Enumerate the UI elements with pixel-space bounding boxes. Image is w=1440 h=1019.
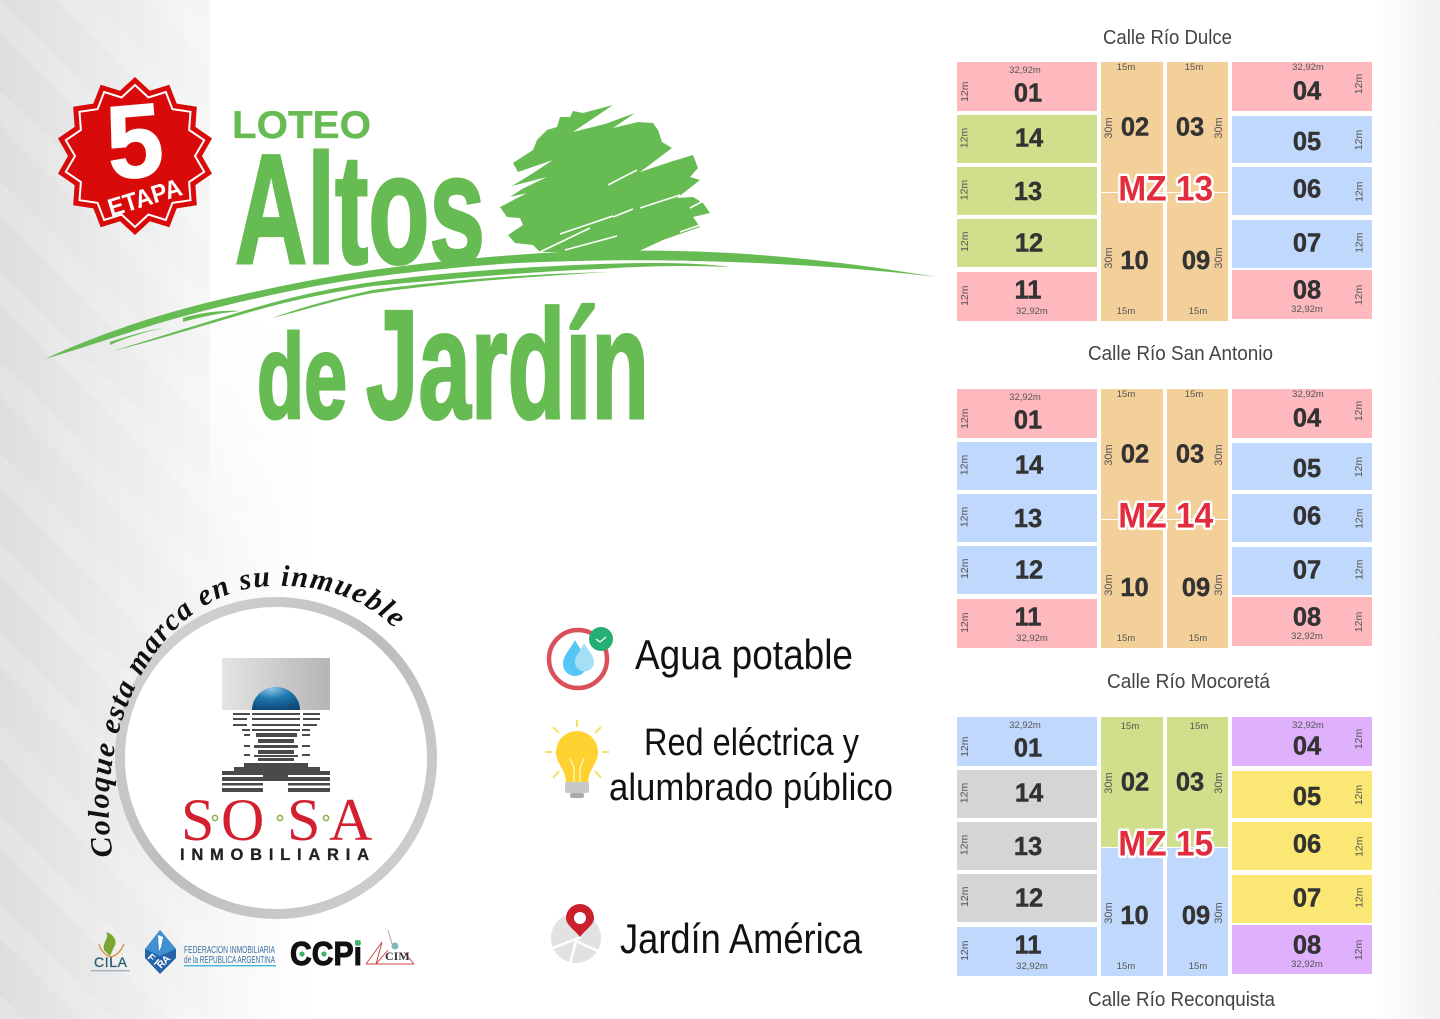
panel: manzana 15: 04: [1293, 732, 1322, 760]
panel: manzana 14: 13: [1014, 505, 1042, 533]
panel: manzana 15: 15m: [1189, 961, 1207, 972]
icon: map pin: [551, 904, 601, 964]
logo words: de Jardín: Jardín: [366, 278, 649, 451]
panel: manzana 13: 12m: [958, 180, 970, 200]
logo building mark: [222, 658, 330, 792]
panel: manzana 13: 13: [1014, 178, 1042, 206]
logo: Federación Inmobiliaria: [184, 945, 276, 966]
service: red eléctrica: [545, 720, 893, 809]
panel: manzana 13: 32,92m: [1292, 62, 1324, 73]
panel: manzana 13: 07: [1293, 230, 1321, 258]
logo: CIM: [366, 930, 414, 964]
text: red eléctrica: alumbrado público: [609, 767, 893, 809]
panel: manzana 14: 30m: [1213, 574, 1225, 596]
street label: Calle Río San Antonio: Calle Río San Antonio: [1088, 343, 1273, 365]
panel: manzana 13: 12m: [1353, 74, 1365, 94]
panel: manzana 14: 12m: [1353, 401, 1365, 421]
street label: Calle Río Reconquista: Calle Río Reconquista: [1088, 989, 1276, 1011]
panel: manzana 15: 12m: [1353, 785, 1365, 805]
icon: light bulb: [545, 720, 609, 798]
logo: CIM: CIM: [385, 949, 410, 963]
panel: manzana 14: 12m: [1353, 559, 1365, 580]
logo swoosh: [45, 251, 937, 359]
panel: manzana 15: 15m: [1121, 721, 1139, 732]
panel: manzana 14: 32,92m: [1016, 633, 1048, 644]
panel: manzana 13: 12: [1015, 230, 1043, 258]
panel: manzana 14: [957, 389, 1372, 648]
panel: manzana 15: 12m: [959, 736, 971, 757]
panel: manzana 15: 03: [1176, 769, 1204, 797]
panel: manzana 14: 10: [1120, 574, 1149, 602]
panel: manzana 14: 05: [1293, 455, 1321, 483]
text: agua potable: Agua potable: [635, 631, 853, 678]
panel: manzana 13: 03: [1176, 114, 1204, 142]
panel: manzana 14: 01: [1014, 407, 1042, 435]
panel: manzana 13: 05: [1293, 128, 1321, 156]
panel: manzana 15: 13: [1014, 833, 1042, 861]
panel: manzana 15: 32,92m: [1009, 720, 1041, 731]
panel: manzana 13: 15m: [1189, 306, 1207, 317]
panel: manzana 14: 12: [1015, 557, 1043, 585]
panel: manzana 15: 12m: [1353, 940, 1365, 960]
panel: manzana 14: 32,92m: [1009, 392, 1041, 403]
panel: manzana 13: [957, 62, 1372, 321]
panel: manzana 14: MZ 14: [1118, 497, 1214, 536]
panel: manzana 15: 14: [1015, 780, 1044, 808]
panel: manzana 14: 07: [1293, 557, 1321, 585]
partner logos: [91, 930, 414, 974]
panel: manzana 14: 02: [1121, 441, 1149, 469]
panel: manzana 14: 12m: [1353, 612, 1365, 632]
panel: manzana 13: 12m: [1353, 181, 1365, 202]
panel: manzana 14: 30m: [1103, 574, 1115, 596]
panel: manzana 13: 30m: [1103, 117, 1115, 139]
panel: manzana 14: 15m: [1185, 389, 1203, 400]
logo ring: [120, 602, 432, 914]
logo words: de Jardín: de: [257, 310, 347, 444]
panel: manzana 15: 06: [1293, 831, 1321, 859]
panel: manzana 13: 02: [1121, 114, 1149, 142]
service: ubicación: [551, 904, 863, 964]
logo: CILA: [91, 932, 130, 971]
panel: manzana 13: 12m: [1353, 232, 1365, 253]
street label: Calle Río Mocoretá: Calle Río Mocoretá: [1107, 671, 1271, 693]
logo tree: [500, 105, 710, 252]
logo: CCPi: CCPi: [290, 935, 362, 972]
logo: FIRA: FI: [145, 952, 161, 968]
service: agua potable: [549, 627, 853, 688]
panel: manzana 15: 12m: [1353, 729, 1365, 749]
panel: manzana 15: [957, 717, 1372, 976]
panel: manzana 13: 12m: [958, 128, 970, 148]
panel: manzana 15: 12m: [959, 940, 971, 961]
logo: Federación Inmobiliaria: de la REPUBLICA ARGENTINA: [184, 955, 275, 966]
panel: manzana 13: 32,92m: [1009, 65, 1041, 76]
panel: manzana 14: 03: [1176, 441, 1204, 469]
badge: 5 etapa: [58, 77, 212, 235]
panel: manzana 14: 11: [1015, 603, 1041, 631]
logo: CILA: CILA: [94, 954, 128, 970]
panel: manzana 13: 15m: [1117, 306, 1135, 317]
panel: manzana 13: 12m: [959, 231, 971, 252]
panel: manzana 13: 12m: [1353, 130, 1365, 150]
panel: manzana 15: 12m: [958, 783, 970, 803]
panel: manzana 15: MZ 15: [1118, 825, 1213, 864]
panel: manzana 14: 12m: [959, 408, 971, 429]
panel: manzana 14: 12m: [958, 507, 970, 527]
panel: manzana 13: 12m: [959, 285, 971, 306]
logo word: SOSA: [181, 787, 372, 853]
panel: manzana 14: 12m: [1353, 457, 1365, 477]
panel: manzana 15: 12: [1015, 885, 1043, 913]
panel: manzana 14: 32,92m: [1291, 631, 1323, 642]
logo: Federación Inmobiliaria: FEDERACION INMOBILIARIA: [184, 945, 275, 956]
panel: manzana 15: 02: [1121, 769, 1149, 797]
icon: water drops: [549, 627, 613, 688]
panel: manzana 13: 30m: [1103, 247, 1115, 269]
panel: manzana 14: 12m: [958, 455, 970, 475]
badge: 5 etapa: ETAPA: [105, 174, 185, 222]
panel: manzana 14: 14: [1015, 452, 1044, 480]
logo word: SOSA: A: [329, 787, 372, 853]
panel: manzana 13: 32,92m: [1291, 304, 1323, 315]
panel: manzana 13: 09: [1182, 247, 1210, 275]
panel: manzana 14: 12m: [1353, 508, 1365, 529]
panel: manzana 13: 30m: [1213, 117, 1225, 139]
panel: manzana 15: 11: [1015, 931, 1041, 959]
panel: manzana 13: MZ 13: [1118, 170, 1213, 209]
panel: manzana 15: 07: [1293, 885, 1321, 913]
panel: manzana 14: 15m: [1117, 633, 1135, 644]
panel: manzana 14: 12m: [959, 558, 971, 579]
panel: manzana 15: 09: [1182, 902, 1210, 930]
logo: Altos de Jardín: [45, 104, 937, 451]
panel: manzana 15: 32,92m: [1016, 961, 1048, 972]
panel: manzana 15: 12m: [1353, 836, 1365, 857]
panel: manzana 13: 06: [1293, 176, 1321, 204]
panel: manzana 14: 32,92m: [1292, 389, 1324, 400]
text: red eléctrica: [609, 722, 893, 809]
panel: manzana 14: 30m: [1103, 444, 1115, 466]
panel: manzana 13: 15m: [1117, 62, 1135, 73]
logo word: Inmobiliaria: INMOBILIARIA: [180, 846, 369, 864]
panel: manzana 15: 30m: [1103, 902, 1115, 924]
panel: manzana 13: 10: [1120, 247, 1149, 275]
panel: manzana 14: 12m: [959, 612, 971, 633]
panel: manzana 13: 32,92m: [1016, 306, 1048, 317]
panel: manzana 14: 15m: [1117, 389, 1135, 400]
panel: manzana 13: 30m: [1213, 247, 1225, 269]
logo word: LOTEO: LOTEO: [232, 104, 371, 147]
panel: manzana 13: 14: [1015, 125, 1044, 153]
panel: manzana 15: 10: [1120, 902, 1149, 930]
street label: Calle Río Dulce: Calle Río Dulce: [1103, 27, 1232, 49]
panel: manzana 15: 12m: [958, 835, 970, 855]
logo word: SOSA: O: [221, 787, 264, 853]
panel: manzana 15: 32,92m: [1292, 720, 1324, 731]
logo word: SOSA: S: [181, 787, 214, 853]
panel: manzana 13: 08: [1293, 276, 1321, 304]
panel: manzana 15: 12m: [1353, 887, 1365, 908]
text: Jardín América: Jardín América: [620, 915, 863, 962]
panel: manzana 15: 15m: [1190, 721, 1208, 732]
panel: manzana 13: 12m: [959, 81, 971, 102]
panel: manzana 14: 15m: [1189, 633, 1207, 644]
logo: FIRA: RA: [155, 953, 173, 971]
panel: manzana 13: 04: [1293, 77, 1322, 105]
panel: manzana 15: 32,92m: [1291, 959, 1323, 970]
panel: manzana 13: 12m: [1353, 285, 1365, 305]
panel: manzana 14: 04: [1293, 404, 1322, 432]
panel: manzana 13: 11: [1015, 276, 1041, 304]
panel: manzana 14: 08: [1293, 603, 1321, 631]
panel: manzana 15: 08: [1293, 931, 1321, 959]
badge: 5 etapa: 5: [102, 82, 168, 202]
panel: manzana 15: 30m: [1213, 772, 1225, 794]
logo word: SOSA: S: [287, 787, 320, 853]
panel: manzana 13: 15m: [1185, 62, 1203, 73]
logo words: de Jardín: [257, 278, 649, 451]
circle logo: Sosa Inmobiliaria: [120, 602, 432, 914]
logo: FIRA: [145, 930, 176, 974]
panel: manzana 15: 05: [1293, 783, 1321, 811]
logo word: Altos: Altos: [235, 123, 485, 297]
text: red eléctrica: Red eléctrica y: [644, 722, 859, 764]
panel: manzana 14: 09: [1182, 574, 1210, 602]
panel: manzana 14: 06: [1293, 503, 1321, 531]
panel: manzana 13: 01: [1014, 80, 1042, 108]
panel: manzana 15: 01: [1014, 735, 1042, 763]
panel: manzana 14: 30m: [1213, 444, 1225, 466]
panel: manzana 15: 30m: [1103, 772, 1115, 794]
tagline on arc: Coloque esta marca en su inmueble: [88, 565, 402, 856]
panel: manzana 15: 15m: [1117, 961, 1135, 972]
panel: manzana 15: 12m: [959, 886, 971, 907]
panel: manzana 15: 30m: [1213, 902, 1225, 924]
